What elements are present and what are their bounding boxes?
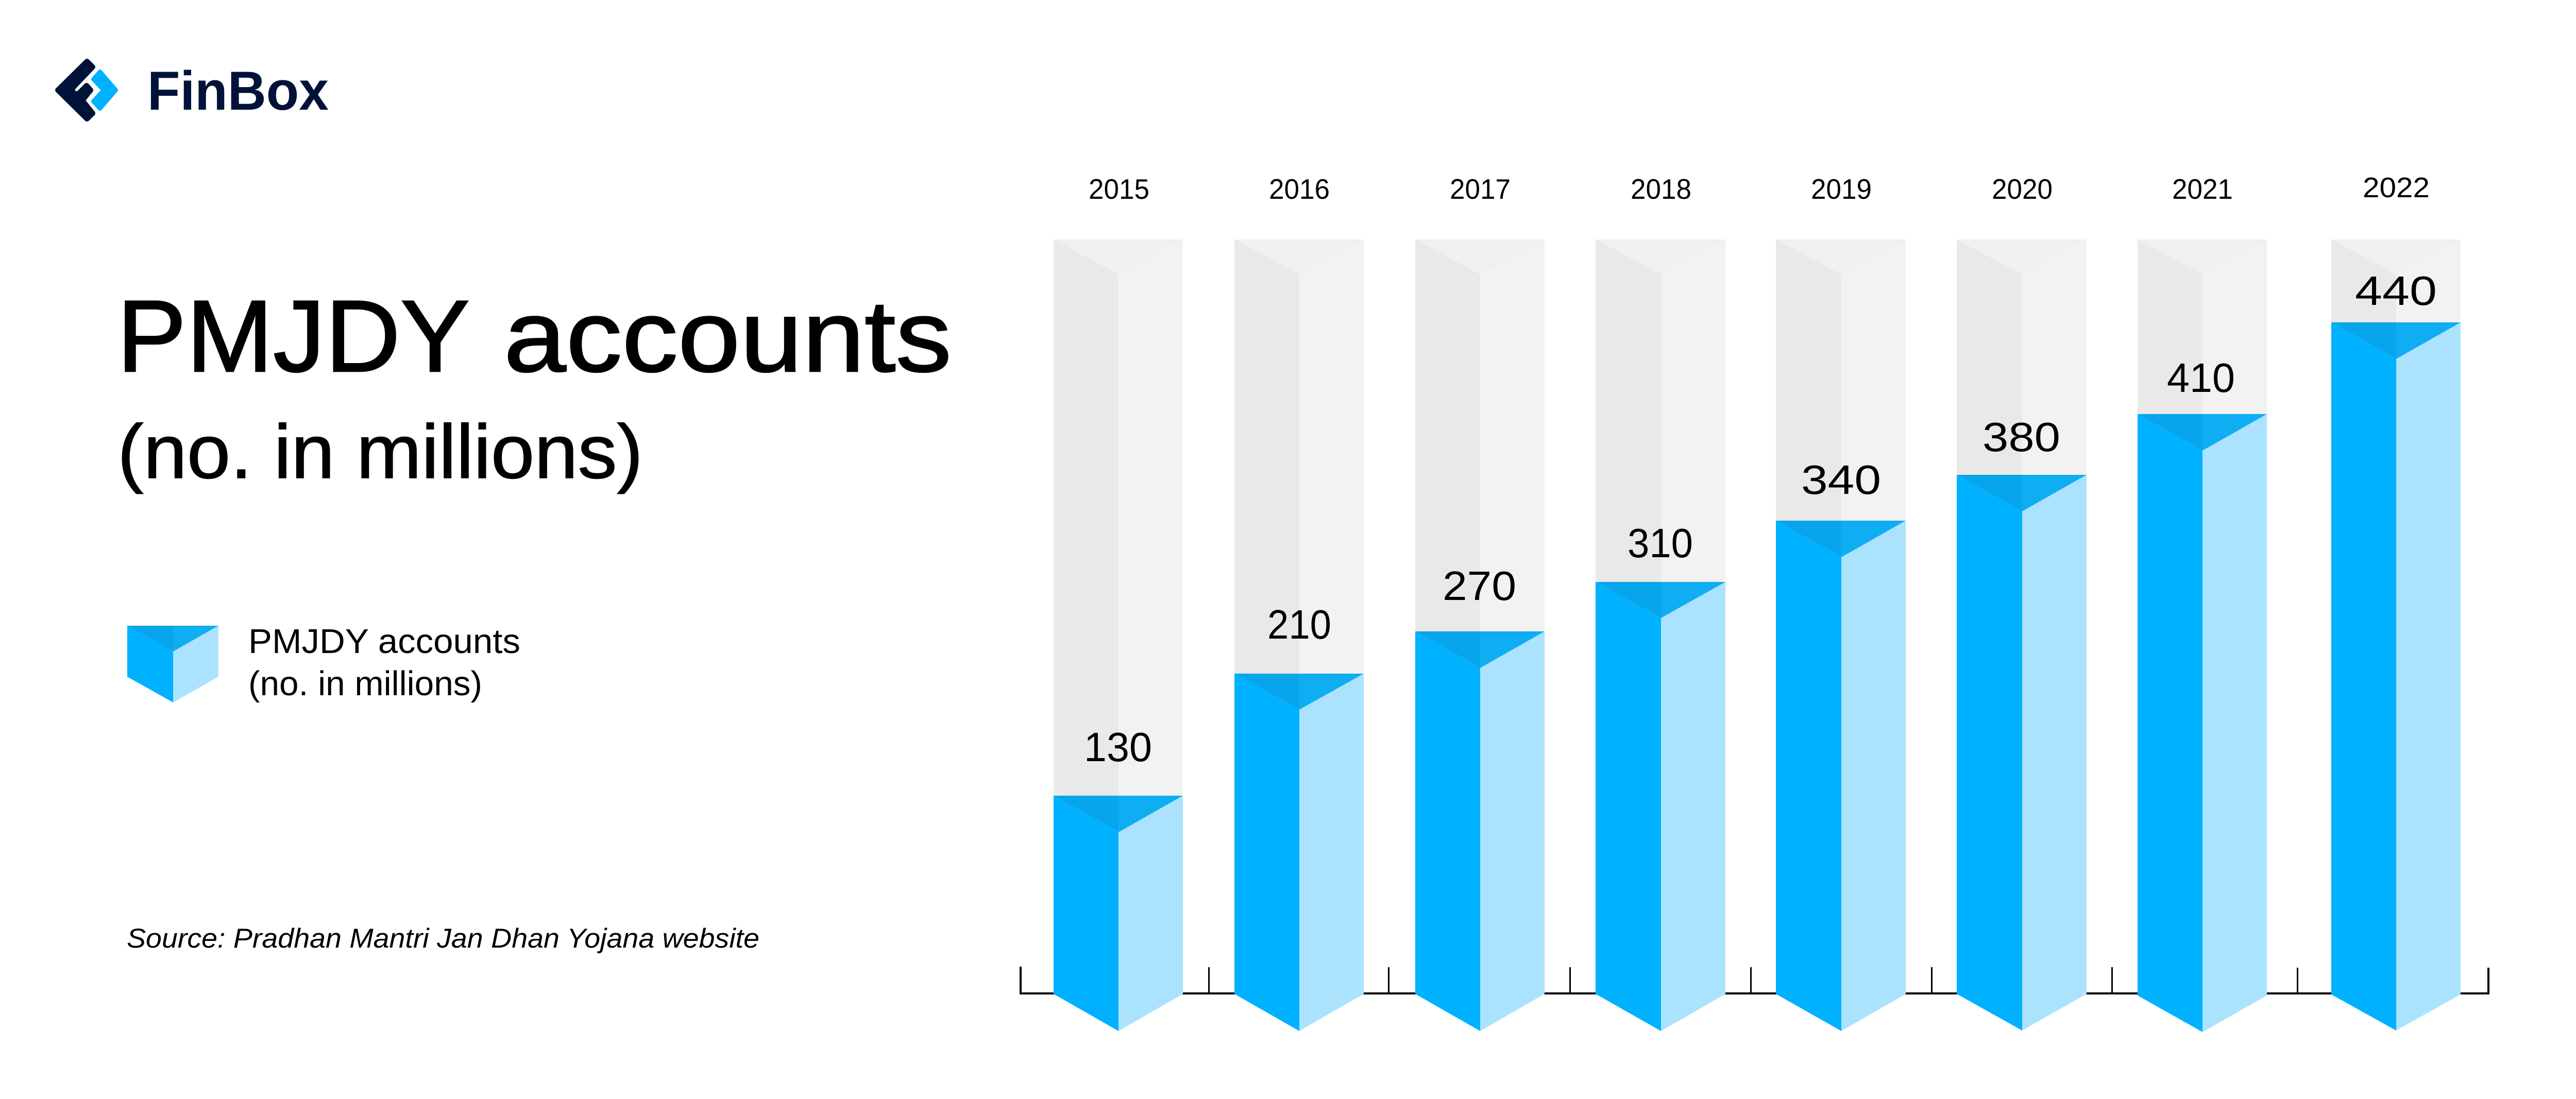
subtitle: (no. in millions): [117, 409, 643, 494]
column 2017: [1415, 631, 1545, 1031]
legend swatch: [127, 626, 218, 702]
bar 2021: 410: [2138, 173, 2267, 1032]
bar 2018: 310: [1596, 173, 1725, 1031]
value 340: 340: [1801, 457, 1881, 503]
year label 2015: 2015: [1089, 173, 1149, 205]
year label 2018: 2018: [1631, 173, 1691, 205]
value 440: 440: [2355, 268, 2437, 314]
value 310: 310: [1628, 520, 1693, 566]
logo: FinBox: [58, 60, 329, 122]
year label 2019: 2019: [1811, 173, 1872, 205]
legend label: PMJDY accounts: [248, 622, 520, 661]
year label 2022: 2022: [2363, 171, 2430, 203]
title: PMJDY: [117, 279, 470, 393]
logo wordmark: FinBox: [147, 60, 329, 122]
icon: FinBox mark: [58, 61, 116, 119]
value 410: 410: [2167, 355, 2235, 401]
track 2015: [1054, 239, 1183, 796]
track 2019: [1776, 239, 1906, 521]
track 2022: [2331, 239, 2461, 322]
bar 2019: 340: [1776, 173, 1906, 1031]
column 2018: [1596, 582, 1725, 1031]
track 2018: [1596, 239, 1725, 582]
bar 2017: 270: [1415, 173, 1545, 1031]
bar 2020: 380: [1957, 173, 2087, 1031]
year label 2021: 2021: [2172, 173, 2233, 205]
column 2021: [2138, 414, 2267, 1032]
legend: [127, 622, 530, 703]
title: accounts: [504, 279, 952, 393]
column 2019: [1776, 521, 1906, 1031]
x axis with ticks: [1020, 967, 2489, 994]
source note: Source: Pradhan Mantri Jan Dhan Yojana website: [127, 923, 759, 954]
track 2020: [1957, 239, 2087, 475]
value 130: 130: [1084, 724, 1152, 770]
bar 2022: 440: [2331, 171, 2461, 1031]
column 2022: [2331, 322, 2461, 1031]
column 2016: [1234, 674, 1364, 1031]
track 2021: [2138, 239, 2267, 414]
column 2015: [1054, 796, 1183, 1031]
value 210: 210: [1267, 602, 1331, 647]
year label 2016: 2016: [1269, 173, 1330, 205]
year label 2017: 2017: [1450, 173, 1511, 205]
legend label: (no. in millions): [248, 664, 482, 703]
value 380: 380: [1982, 414, 2060, 460]
track 2017: [1415, 239, 1545, 631]
bar 2015: 130: [1054, 173, 1183, 1031]
column 2020: [1957, 475, 2087, 1031]
year label 2020: 2020: [1992, 173, 2053, 205]
track 2016: [1234, 239, 1364, 674]
value 270: 270: [1443, 563, 1516, 609]
bar 2016: 210: [1234, 173, 1364, 1031]
